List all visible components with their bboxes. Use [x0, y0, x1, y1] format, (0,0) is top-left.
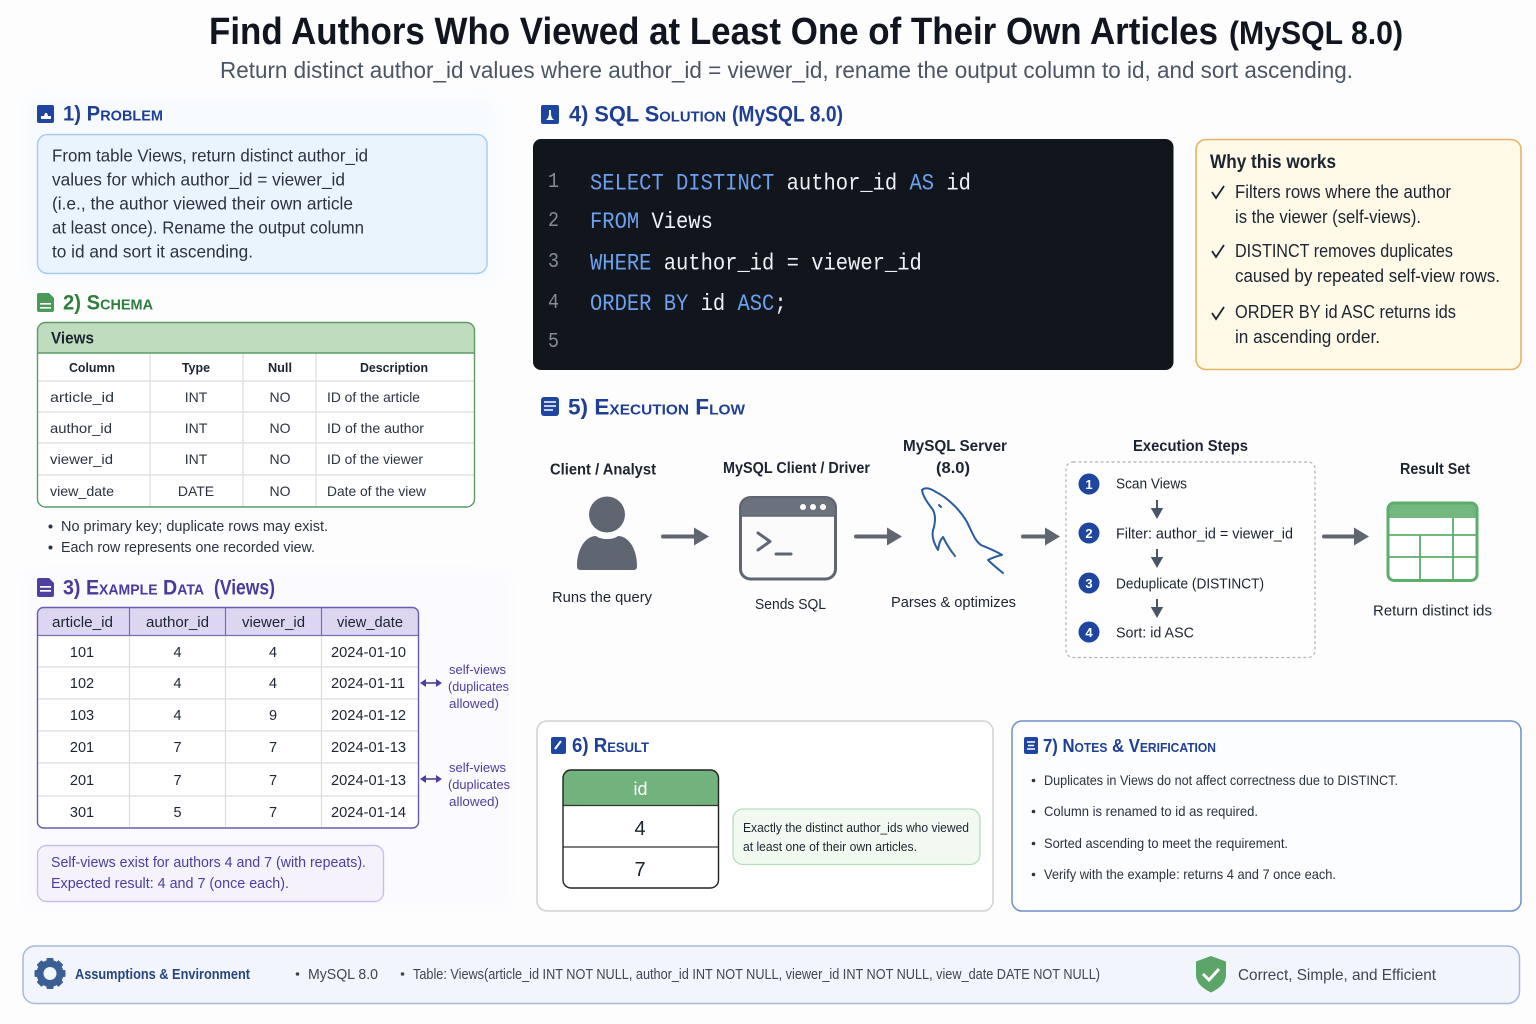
- step 2: Filter: author_id = viewer_id: [1116, 526, 1293, 542]
- callout: result note: at least one of their own articles.: [743, 840, 917, 854]
- example data table: 301: [70, 805, 94, 821]
- panel: notes and verification: [1012, 721, 1521, 911]
- annotation: self-views row 102: allowed): [449, 696, 499, 711]
- schema table: NO: [270, 451, 291, 467]
- callout: result note: Exactly the distinct author_ids who viewed: [743, 821, 969, 835]
- panel: execution flow: [541, 394, 1492, 658]
- example data table: 201: [70, 740, 94, 756]
- example data table: 2024-01-13: [331, 740, 406, 756]
- step 4: [1078, 622, 1194, 642]
- flow node: execution steps: Execution Steps: [1133, 438, 1248, 455]
- problem text box: From table Views, return distinct author_id: [52, 146, 368, 166]
- flow node: client driver: Sends SQL: [755, 596, 826, 613]
- flow node: result set: Return distinct ids: [1373, 602, 1492, 620]
- sql code: WHERE author_id = viewer_id: [590, 250, 922, 277]
- icon: dolphin: [922, 488, 1003, 573]
- schema table: ID of the viewer: [327, 451, 423, 467]
- panel: problem: [37, 102, 487, 274]
- example data table: 2024-01-11: [331, 676, 405, 692]
- example data table: 101: [70, 645, 94, 661]
- callout: expected result: Expected result: 4 and 7 (once each).: [51, 876, 289, 892]
- example data table: 2024-01-12: [331, 708, 406, 724]
- schema notes: Each row represents one recorded view.: [61, 540, 315, 556]
- panel: why this works: DISTINCT removes duplicates: [1235, 241, 1453, 261]
- step 3: 3: [1085, 576, 1093, 591]
- notes list: Sorted ascending to meet the requirement.: [1044, 835, 1288, 851]
- annotation: self-views row 102: [420, 662, 509, 711]
- line numbers: 4: [548, 292, 559, 315]
- icon: execution flow: [541, 397, 559, 416]
- schema table: Date of the view: [327, 483, 427, 499]
- panel: example data: [37, 576, 510, 902]
- flow node: mysql server: (8.0): [936, 460, 970, 477]
- icon: example data: [37, 578, 54, 597]
- icon: schema: [37, 293, 54, 312]
- step 2: [1078, 522, 1293, 544]
- heading: execution flow: 5) Execution Flow: [568, 394, 746, 420]
- problem text box: (i.e., the author viewed their own article: [52, 194, 353, 214]
- step 4: 4: [1085, 625, 1093, 640]
- step 1: 1: [1085, 477, 1093, 492]
- heading: example data: (Views): [214, 576, 275, 600]
- schema table: Null: [268, 360, 292, 375]
- schema table: NO: [270, 420, 291, 436]
- icon: problem: [37, 105, 54, 123]
- sql code: SELECT DISTINCT author_id AS id: [590, 170, 971, 197]
- schema table: DATE: [178, 483, 214, 499]
- icon: terminal window: [740, 498, 836, 579]
- footer environment list: Table: Views(article_id INT NOT NULL, author_id INT NOT NULL, viewer_id INT NOT NULL, view_date DATE NOT NULL): [413, 967, 1100, 983]
- annotation: self-views row 102: self-views: [449, 662, 506, 677]
- result table: [563, 770, 718, 888]
- flow node: client: Runs the query: [552, 589, 652, 606]
- example data table: 2024-01-10: [331, 645, 406, 661]
- example data table: 4: [173, 645, 182, 661]
- panel: schema: [37, 292, 474, 556]
- step 1: Scan Views: [1116, 476, 1187, 492]
- schema table: Type: [182, 360, 210, 375]
- example data table: 4: [173, 708, 182, 724]
- problem text box: [38, 134, 487, 274]
- result table: 7: [634, 859, 646, 881]
- line numbers: 5: [548, 331, 559, 354]
- step 4: Sort: id ASC: [1116, 624, 1194, 642]
- result table: id: [633, 779, 648, 799]
- heading: example data: 3) Example Data: [63, 576, 204, 600]
- line numbers: 3: [548, 251, 559, 274]
- notes list: [1032, 772, 1398, 882]
- flow node: mysql server: [891, 438, 1016, 611]
- subtitle: Return distinct author_id values where author_id = viewer_id, rename the output column to id, and sort ascending.: [220, 57, 1353, 83]
- line numbers: [548, 171, 559, 354]
- example data table: 4: [269, 645, 277, 661]
- sql code: ORDER BY id ASC;: [590, 291, 787, 317]
- panel: why this works: is the viewer (self-views).: [1235, 207, 1421, 227]
- step 3: Deduplicate (DISTINCT): [1116, 576, 1264, 592]
- callout: expected result: Self-views exist for authors 4 and 7 (with repeats).: [51, 855, 366, 871]
- example data table: 7: [269, 740, 277, 756]
- flow node: execution steps: [1066, 438, 1315, 658]
- callout: result note: [733, 809, 980, 864]
- footer verdict: Correct, Simple, and Efficient: [1238, 967, 1437, 984]
- example data table: viewer_id: [242, 614, 305, 631]
- footer: assumptions and environment: [23, 946, 1520, 1004]
- flow node: result set: Result Set: [1400, 461, 1470, 478]
- annotation: self-views row 201: (duplicates: [448, 777, 510, 792]
- schema table: view_date: [50, 483, 114, 499]
- step 1: [1078, 474, 1187, 494]
- title: (MySQL 8.0): [1229, 15, 1403, 51]
- heading: sql solution: (MySQL 8.0): [732, 102, 843, 126]
- arrow: [1324, 528, 1369, 546]
- example data table: 4: [173, 676, 182, 692]
- panel: why this works: [1196, 140, 1521, 370]
- example data table: 7: [173, 773, 182, 789]
- schema table: INT: [185, 420, 208, 436]
- schema notes: [48, 519, 328, 556]
- heading: schema: 2) Schema: [63, 292, 153, 314]
- flow node: client driver: [723, 460, 870, 613]
- problem text box: to id and sort it ascending.: [52, 242, 253, 262]
- schema table: Views: [51, 330, 94, 348]
- arrow: [1152, 549, 1162, 566]
- example data table: 102: [70, 676, 94, 692]
- flow node: client driver: MySQL Client / Driver: [723, 460, 870, 477]
- step 2: 2: [1085, 526, 1093, 541]
- flow node: client: [550, 462, 656, 606]
- schema table: [38, 322, 474, 507]
- problem text box: values for which author_id = viewer_id: [52, 170, 345, 190]
- panel: why this works: ORDER BY id ASC returns ids: [1235, 302, 1456, 322]
- schema table: article_id: [50, 389, 114, 405]
- example data table: 103: [70, 708, 94, 724]
- schema table: NO: [270, 483, 291, 499]
- arrow: [856, 528, 902, 546]
- sql code: [590, 170, 971, 317]
- notes list: Duplicates in Views do not affect correctness due to DISTINCT.: [1044, 772, 1398, 788]
- flow node: mysql server: Parses & optimizes: [891, 594, 1016, 611]
- sql code: FROM Views: [590, 209, 713, 235]
- flow node: mysql server: MySQL Server: [903, 438, 1007, 455]
- schema table: author_id: [50, 420, 112, 436]
- example data table: 4: [269, 676, 277, 692]
- panel: result: [537, 721, 993, 911]
- step 3: [1078, 572, 1264, 594]
- schema table: NO: [270, 389, 291, 405]
- line numbers: 2: [548, 210, 559, 233]
- annotation: self-views row 102: (duplicates: [448, 679, 509, 694]
- panel: why this works: in ascending order.: [1235, 327, 1380, 347]
- icon: gear: [34, 958, 66, 989]
- example data table: 201: [70, 773, 94, 789]
- heading: sql solution: [569, 102, 843, 126]
- schema table: INT: [185, 389, 208, 405]
- panel: sql solution: [533, 102, 1521, 370]
- problem text box: at least once). Rename the output column: [52, 218, 364, 238]
- icon: sql solution: [541, 105, 559, 124]
- notes list: Verify with the example: returns 4 and 7 once each.: [1044, 866, 1336, 882]
- example data table: 2024-01-13: [331, 773, 406, 789]
- arrow: [1152, 500, 1162, 517]
- icon: result table: [1388, 503, 1477, 580]
- notes list: Column is renamed to id as required.: [1044, 803, 1258, 819]
- footer label: Assumptions & Environment: [75, 966, 250, 983]
- icon: result: [551, 737, 566, 754]
- example data table: 7: [173, 740, 182, 756]
- flow node: result set: [1373, 461, 1492, 620]
- example data table: view_date: [337, 614, 403, 631]
- schema notes: No primary key; duplicate rows may exist.: [61, 519, 328, 535]
- heading: sql solution: 4) SQL Solution: [569, 102, 726, 126]
- schema table: viewer_id: [50, 451, 113, 467]
- schema table: Description: [360, 360, 428, 375]
- schema table: Column: [69, 360, 115, 375]
- panel: why this works: caused by repeated self-view rows.: [1235, 266, 1500, 286]
- result table: 4: [634, 818, 646, 840]
- example data table: 7: [269, 773, 277, 789]
- annotation: self-views row 201: [420, 760, 510, 809]
- annotation: self-views row 201: allowed): [449, 794, 499, 809]
- schema table: ID of the author: [327, 420, 424, 436]
- icon: shield check: [1196, 956, 1226, 992]
- heading: result: 6) Result: [572, 735, 649, 757]
- example data table: [38, 608, 418, 828]
- example data table: author_id: [146, 614, 209, 631]
- icon: notes: [1024, 737, 1038, 754]
- example data table: 5: [173, 805, 182, 821]
- arrow: [663, 528, 709, 546]
- title: Find Authors Who Viewed at Least One of Their Own Articles: [209, 11, 1218, 53]
- heading: notes: 7) Notes & Verification: [1043, 736, 1216, 756]
- arrow: [1152, 599, 1162, 616]
- panel: why this works: Why this works: [1210, 152, 1336, 173]
- callout: expected result: [38, 846, 384, 902]
- line numbers: 1: [548, 171, 559, 194]
- arrow: [1023, 528, 1060, 546]
- heading: problem: 1) Problem: [63, 102, 163, 126]
- panel: why this works: Filters rows where the author: [1235, 182, 1451, 202]
- footer environment list: MySQL 8.0: [308, 966, 378, 983]
- schema table: ID of the article: [327, 389, 420, 405]
- annotation: self-views row 201: self-views: [449, 760, 506, 775]
- flow node: client: Client / Analyst: [550, 462, 656, 478]
- example data table: 2024-01-14: [331, 805, 406, 821]
- schema table: INT: [185, 451, 208, 467]
- example data table: 9: [269, 708, 277, 724]
- code block: [533, 139, 1174, 370]
- icon: person: [577, 496, 637, 570]
- example data table: 7: [269, 805, 277, 821]
- example data table: article_id: [52, 614, 113, 631]
